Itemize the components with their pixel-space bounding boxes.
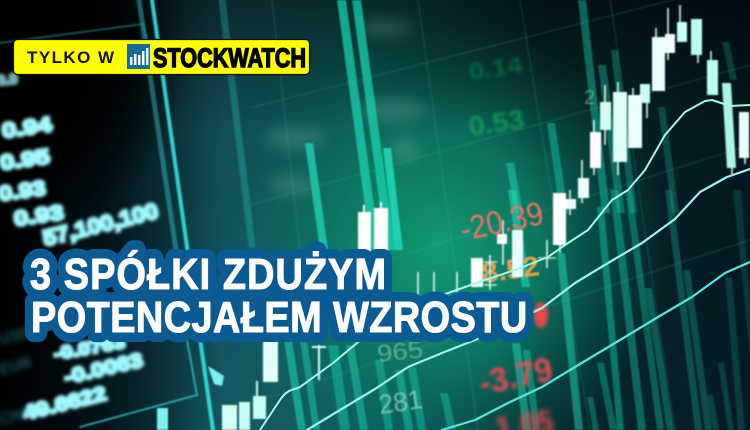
blurred cyan quotes on left panel: 0.94 [0, 113, 54, 143]
dim labels on left panel [0, 324, 34, 429]
title text: POTENCJAŁEM WZROSTU [31, 292, 527, 342]
red and green figures: -20.39 [457, 194, 547, 248]
title text: 3 SPÓŁKI ZDUŻYM [30, 249, 386, 299]
badge label: TYLKO W [27, 48, 115, 67]
title text [30, 249, 527, 342]
red and green figures: 0.14 [467, 52, 525, 86]
title outline: 3 SPÓŁKI ZDUŻYM [30, 249, 386, 299]
red and green figures: -3.79 [476, 350, 556, 403]
red and green figures: 0.53 [467, 103, 526, 142]
blurred cyan quotes on left panel: 49.6622 [21, 383, 109, 425]
chart background volume bars [284, 0, 750, 430]
trend lines [260, 100, 750, 430]
blurred cyan quotes on left panel: 0.93 [12, 201, 65, 231]
title [30, 249, 527, 342]
blurred cyan quotes on left panel: 57,100,100 [40, 198, 161, 251]
blurred cyan quotes on left panel [0, 70, 161, 425]
title outline [30, 249, 527, 342]
left data panel frame [0, 0, 252, 430]
red and green figures: 2 [584, 87, 595, 109]
red and green figures [376, 52, 595, 430]
blurred cyan quotes on left panel: -0.0063 [62, 349, 145, 389]
icon: stockwatch logo [127, 44, 150, 69]
red and green figures: 965 [376, 336, 424, 368]
blurred cyan quotes on left panel: -0.0763 [52, 332, 127, 364]
badge brand name: STOCKWATCH [153, 43, 306, 73]
badge: Tylko w Stockwatch [14, 40, 310, 74]
candlestick chart [157, 5, 749, 430]
title outline: POTENCJAŁEM WZROSTU [31, 292, 527, 342]
red and green figures: 8.52 [480, 250, 541, 289]
red and green figures: 281 [377, 384, 424, 420]
